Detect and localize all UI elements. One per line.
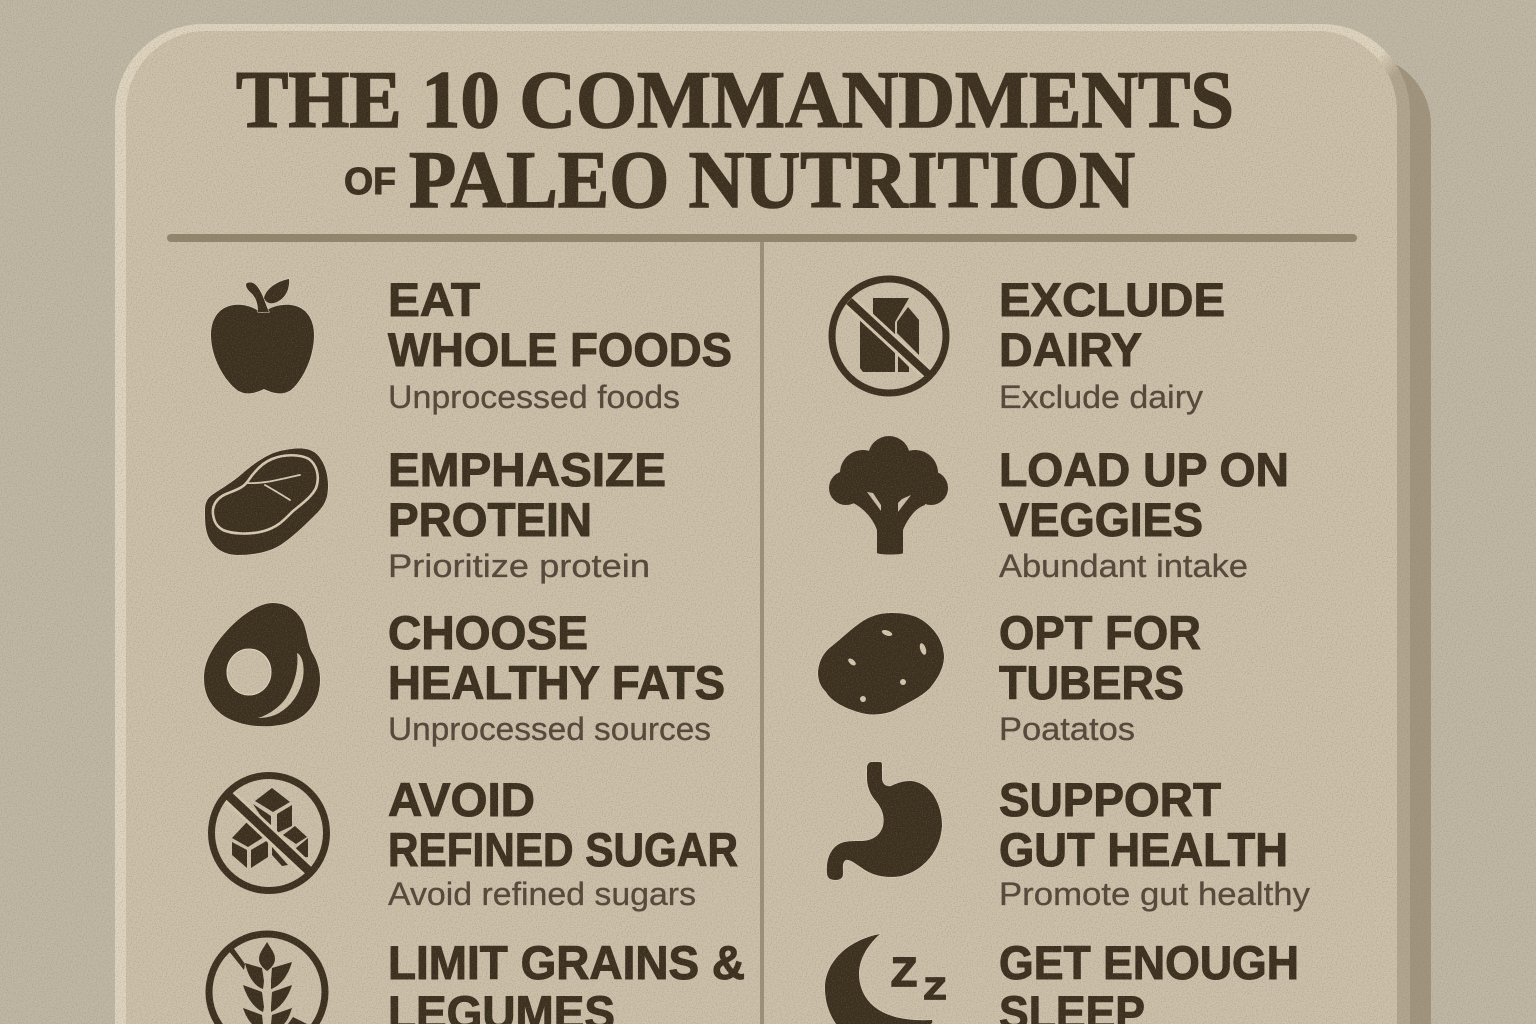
commandment: emphasize protein: EMPHASIZE bbox=[388, 443, 666, 496]
commandment: limit grains and legumes bbox=[388, 936, 745, 1024]
commandment: avoid refined sugar: Avoid refined sugars bbox=[388, 876, 696, 912]
title: OF bbox=[344, 161, 396, 203]
title: THE 10 COMMANDMENTS bbox=[236, 54, 1234, 145]
commandment: get enough sleep bbox=[999, 936, 1299, 1024]
icon: moon and z's: Z bbox=[891, 949, 917, 995]
commandment: load up on veggies: LOAD UP ON bbox=[999, 443, 1289, 496]
panel: left column bbox=[204, 273, 745, 1024]
commandment: load up on veggies: Abundant intake bbox=[999, 548, 1248, 584]
commandment: opt for tubers bbox=[999, 606, 1201, 747]
commandment: emphasize protein bbox=[388, 443, 666, 584]
commandment: eat whole foods: Unprocessed foods bbox=[388, 379, 680, 415]
icon: moon and z's: Z bbox=[924, 971, 946, 1006]
commandment: eat whole foods bbox=[388, 273, 732, 415]
commandment: support gut health: GUT HEALTH bbox=[999, 823, 1288, 876]
commandment: choose healthy fats bbox=[388, 606, 725, 747]
commandment: choose healthy fats: HEALTHY FATS bbox=[388, 656, 725, 709]
commandment: opt for tubers: OPT FOR bbox=[999, 606, 1201, 659]
commandment: eat whole foods: EAT bbox=[388, 273, 480, 326]
icon: no grains bbox=[209, 934, 325, 1024]
commandment: load up on veggies bbox=[999, 443, 1289, 584]
commandment: opt for tubers: TUBERS bbox=[999, 656, 1184, 709]
commandment: emphasize protein: Prioritize protein bbox=[388, 548, 650, 584]
icon: broccoli bbox=[829, 436, 948, 554]
icon: no dairy bbox=[832, 279, 946, 393]
icon: moon and z's bbox=[825, 934, 946, 1024]
title bbox=[236, 54, 1234, 225]
icon: stomach bbox=[827, 762, 942, 880]
commandment: support gut health bbox=[999, 773, 1310, 912]
commandment: exclude dairy: Exclude dairy bbox=[999, 379, 1203, 415]
icon: steak bbox=[205, 448, 328, 555]
commandment: limit grains and legumes: LIMIT GRAINS & bbox=[388, 936, 745, 989]
commandment: exclude dairy: EXCLUDE bbox=[999, 273, 1225, 326]
commandment: support gut health: Promote gut healthy bbox=[999, 876, 1310, 912]
commandment: avoid refined sugar: AVOID bbox=[388, 773, 535, 826]
commandment: choose healthy fats: CHOOSE bbox=[388, 606, 588, 659]
icon: apple bbox=[211, 279, 314, 393]
icon: avocado bbox=[204, 603, 320, 726]
commandment: support gut health: SUPPORT bbox=[999, 773, 1221, 826]
commandment: exclude dairy: DAIRY bbox=[999, 323, 1142, 376]
commandment: eat whole foods: WHOLE FOODS bbox=[388, 323, 732, 376]
commandment: opt for tubers: Poatatos bbox=[999, 711, 1135, 747]
icon: no sugar bbox=[212, 776, 326, 890]
commandment: exclude dairy bbox=[999, 273, 1225, 415]
commandment: choose healthy fats: Unprocessed sources bbox=[388, 711, 711, 747]
panel: right column bbox=[818, 273, 1310, 1024]
commandment: avoid refined sugar: REFINED SUGAR bbox=[388, 823, 738, 876]
commandment: get enough sleep: GET ENOUGH bbox=[999, 936, 1299, 989]
title: PALEO NUTRITION bbox=[409, 134, 1135, 225]
commandment: avoid refined sugar bbox=[388, 773, 738, 912]
commandment: emphasize protein: PROTEIN bbox=[388, 493, 592, 546]
icon: potato bbox=[818, 613, 944, 714]
commandment: load up on veggies: VEGGIES bbox=[999, 493, 1203, 546]
